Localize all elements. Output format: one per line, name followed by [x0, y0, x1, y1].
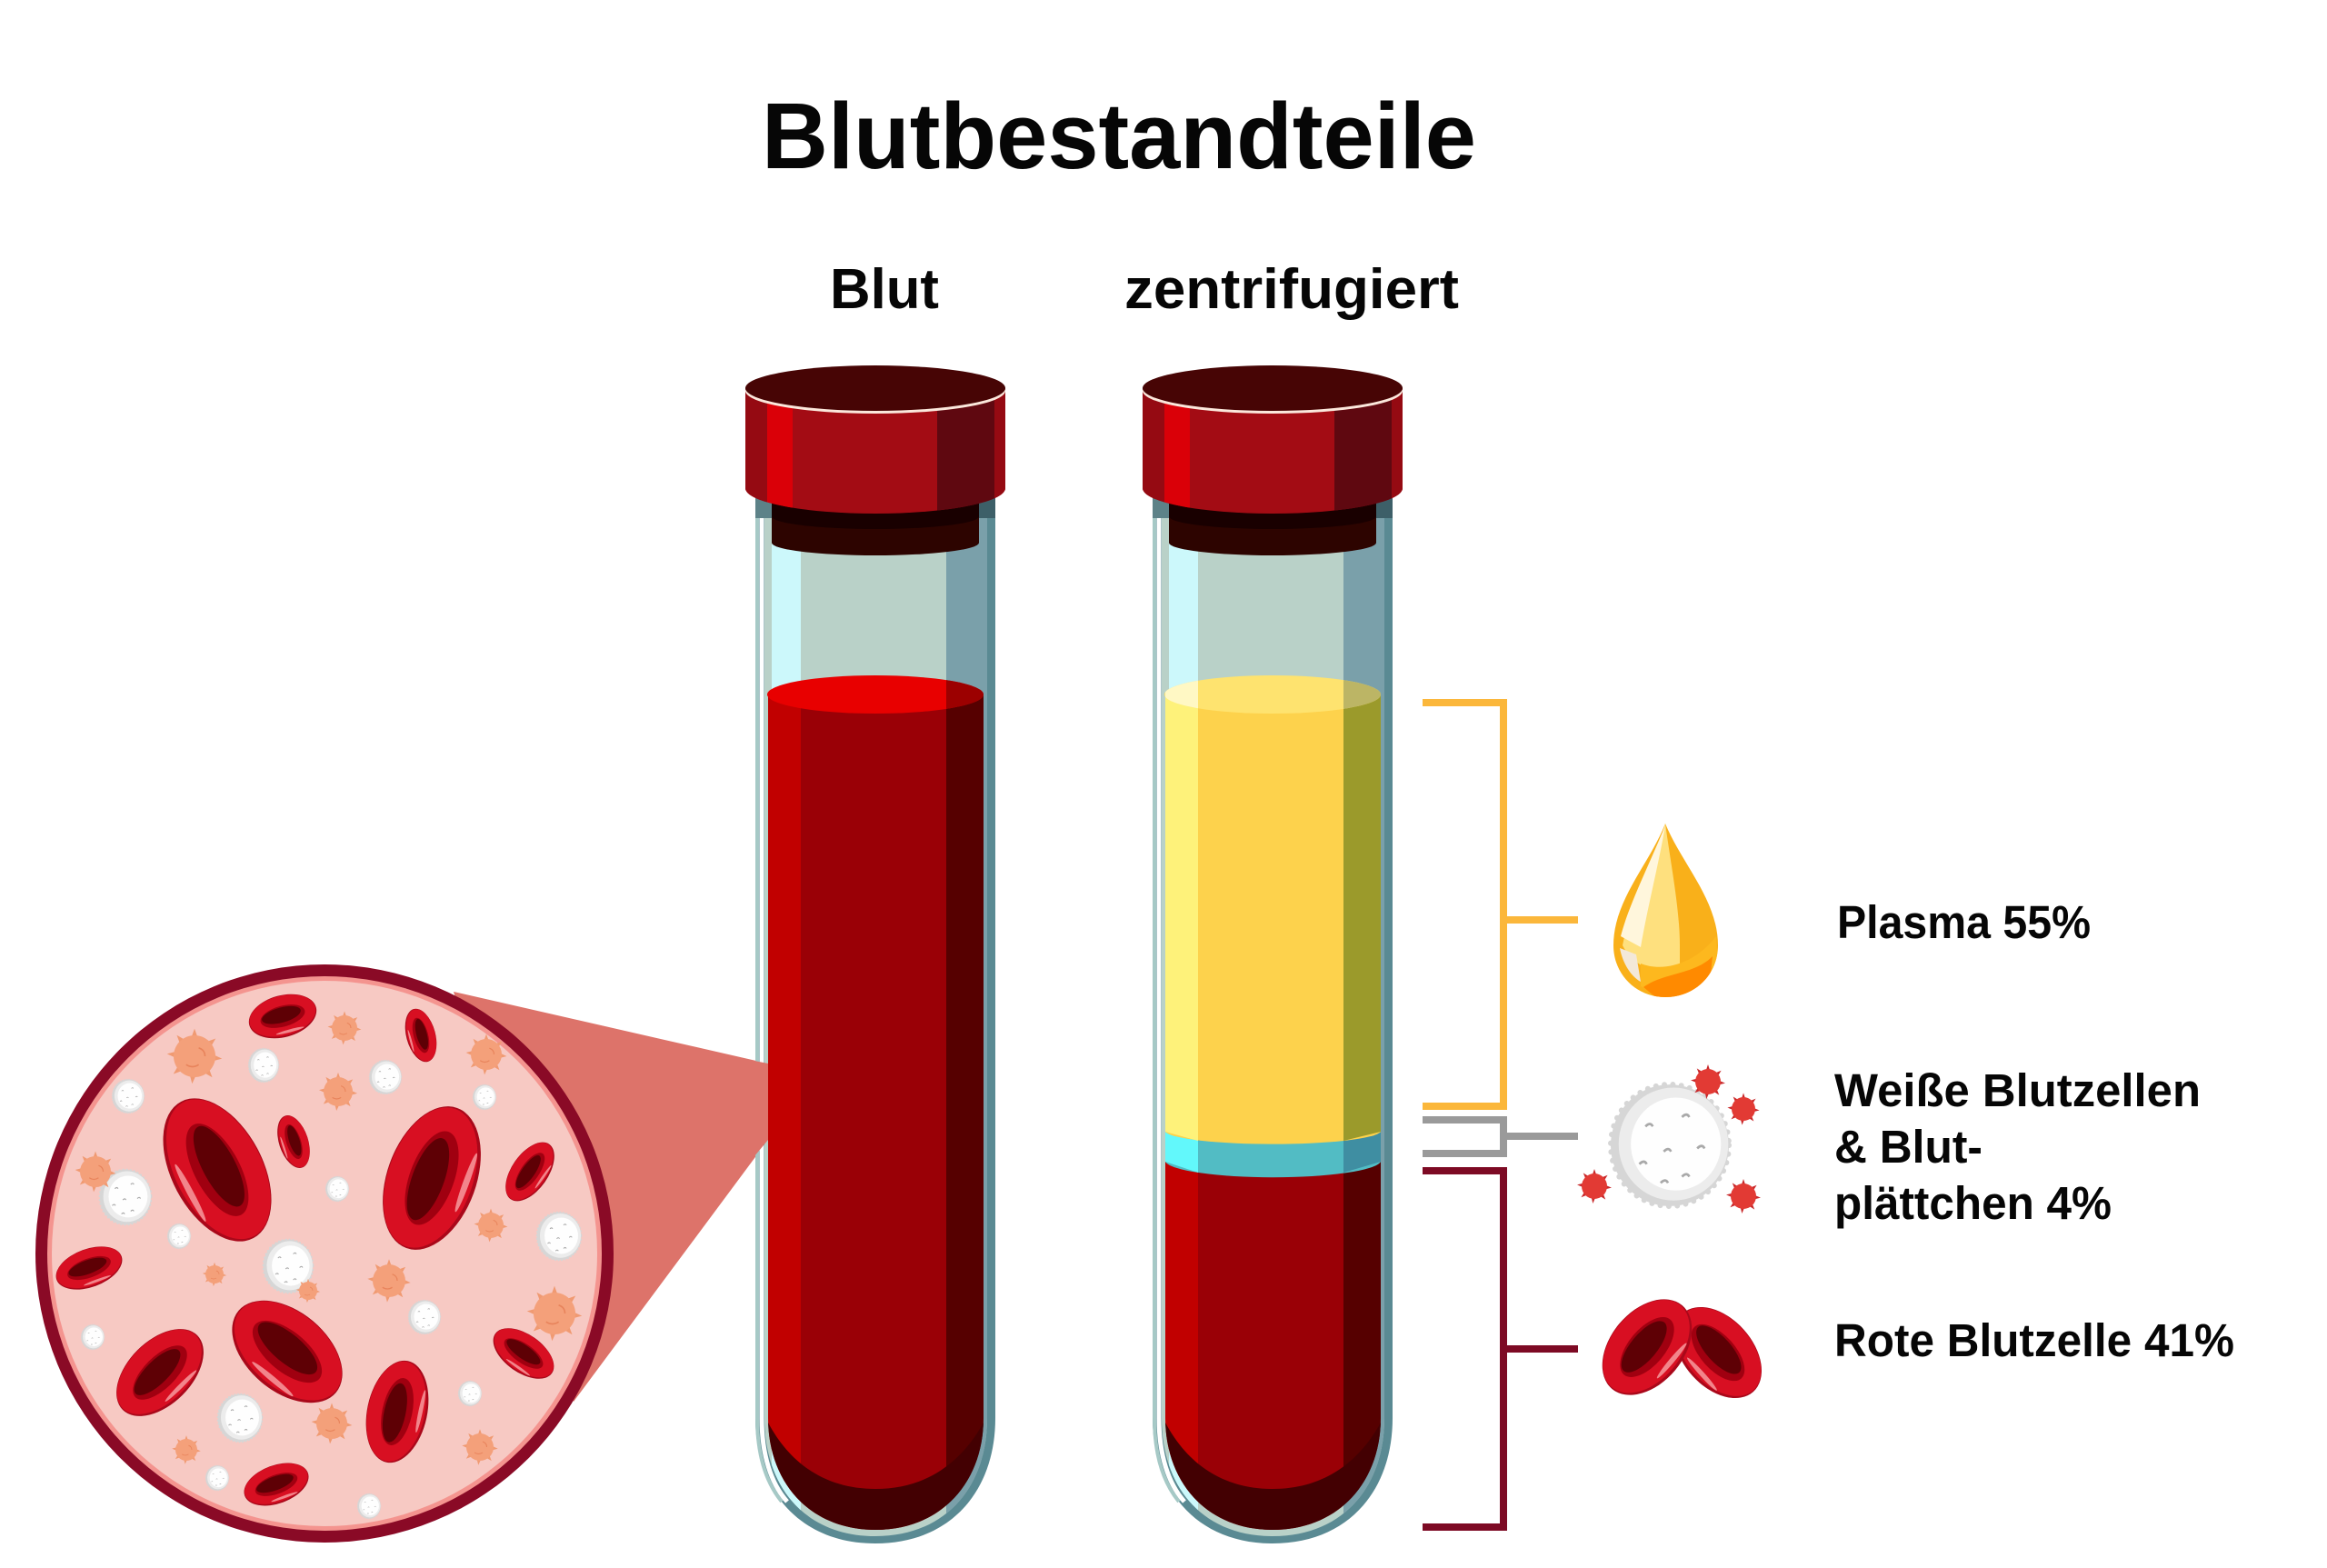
icon: plasma drop [1613, 824, 1718, 997]
label: plasma: Plasma 55% [1837, 896, 2091, 948]
tube gasket [1169, 491, 1376, 555]
magnification cone [454, 992, 768, 1402]
cone overlay on tube [754, 1061, 768, 1156]
test tube: whole blood [745, 365, 1005, 1545]
platelets in circle [75, 1012, 583, 1465]
bracket: plasma [1423, 703, 1578, 1106]
label: white cells and platelets [1834, 1064, 2201, 1229]
label: red cells: Rote Blutzelle 41% [1834, 1314, 2234, 1366]
label: white cells and platelets: & Blut- [1834, 1121, 1982, 1173]
separated layers [1164, 673, 1384, 1545]
magnified blood circle [35, 964, 614, 1543]
test tube: centrifuged blood [1143, 365, 1403, 1545]
bracket: red cells [1423, 1171, 1578, 1527]
icon: white cell with platelets [1577, 1064, 1761, 1213]
label: white cells and platelets: Weiße Blutzellen [1834, 1064, 2201, 1116]
bracket: white cells and platelets [1423, 1120, 1578, 1154]
blood column [767, 673, 987, 1545]
tube cap [745, 365, 1005, 515]
icon: red blood cells [1584, 1282, 1779, 1415]
tube gasket [772, 491, 979, 555]
red blood cells in circle [50, 987, 564, 1513]
tube cap [1143, 365, 1403, 515]
white blood cells in circle [81, 1049, 581, 1519]
label: white cells and platelets: plättchen 4% [1834, 1177, 2112, 1229]
title: Blutbestandteile [762, 84, 1476, 188]
heading: zentrifugiert: zentrifugiert [1124, 258, 1459, 321]
heading: Blut: Blut [830, 258, 939, 321]
